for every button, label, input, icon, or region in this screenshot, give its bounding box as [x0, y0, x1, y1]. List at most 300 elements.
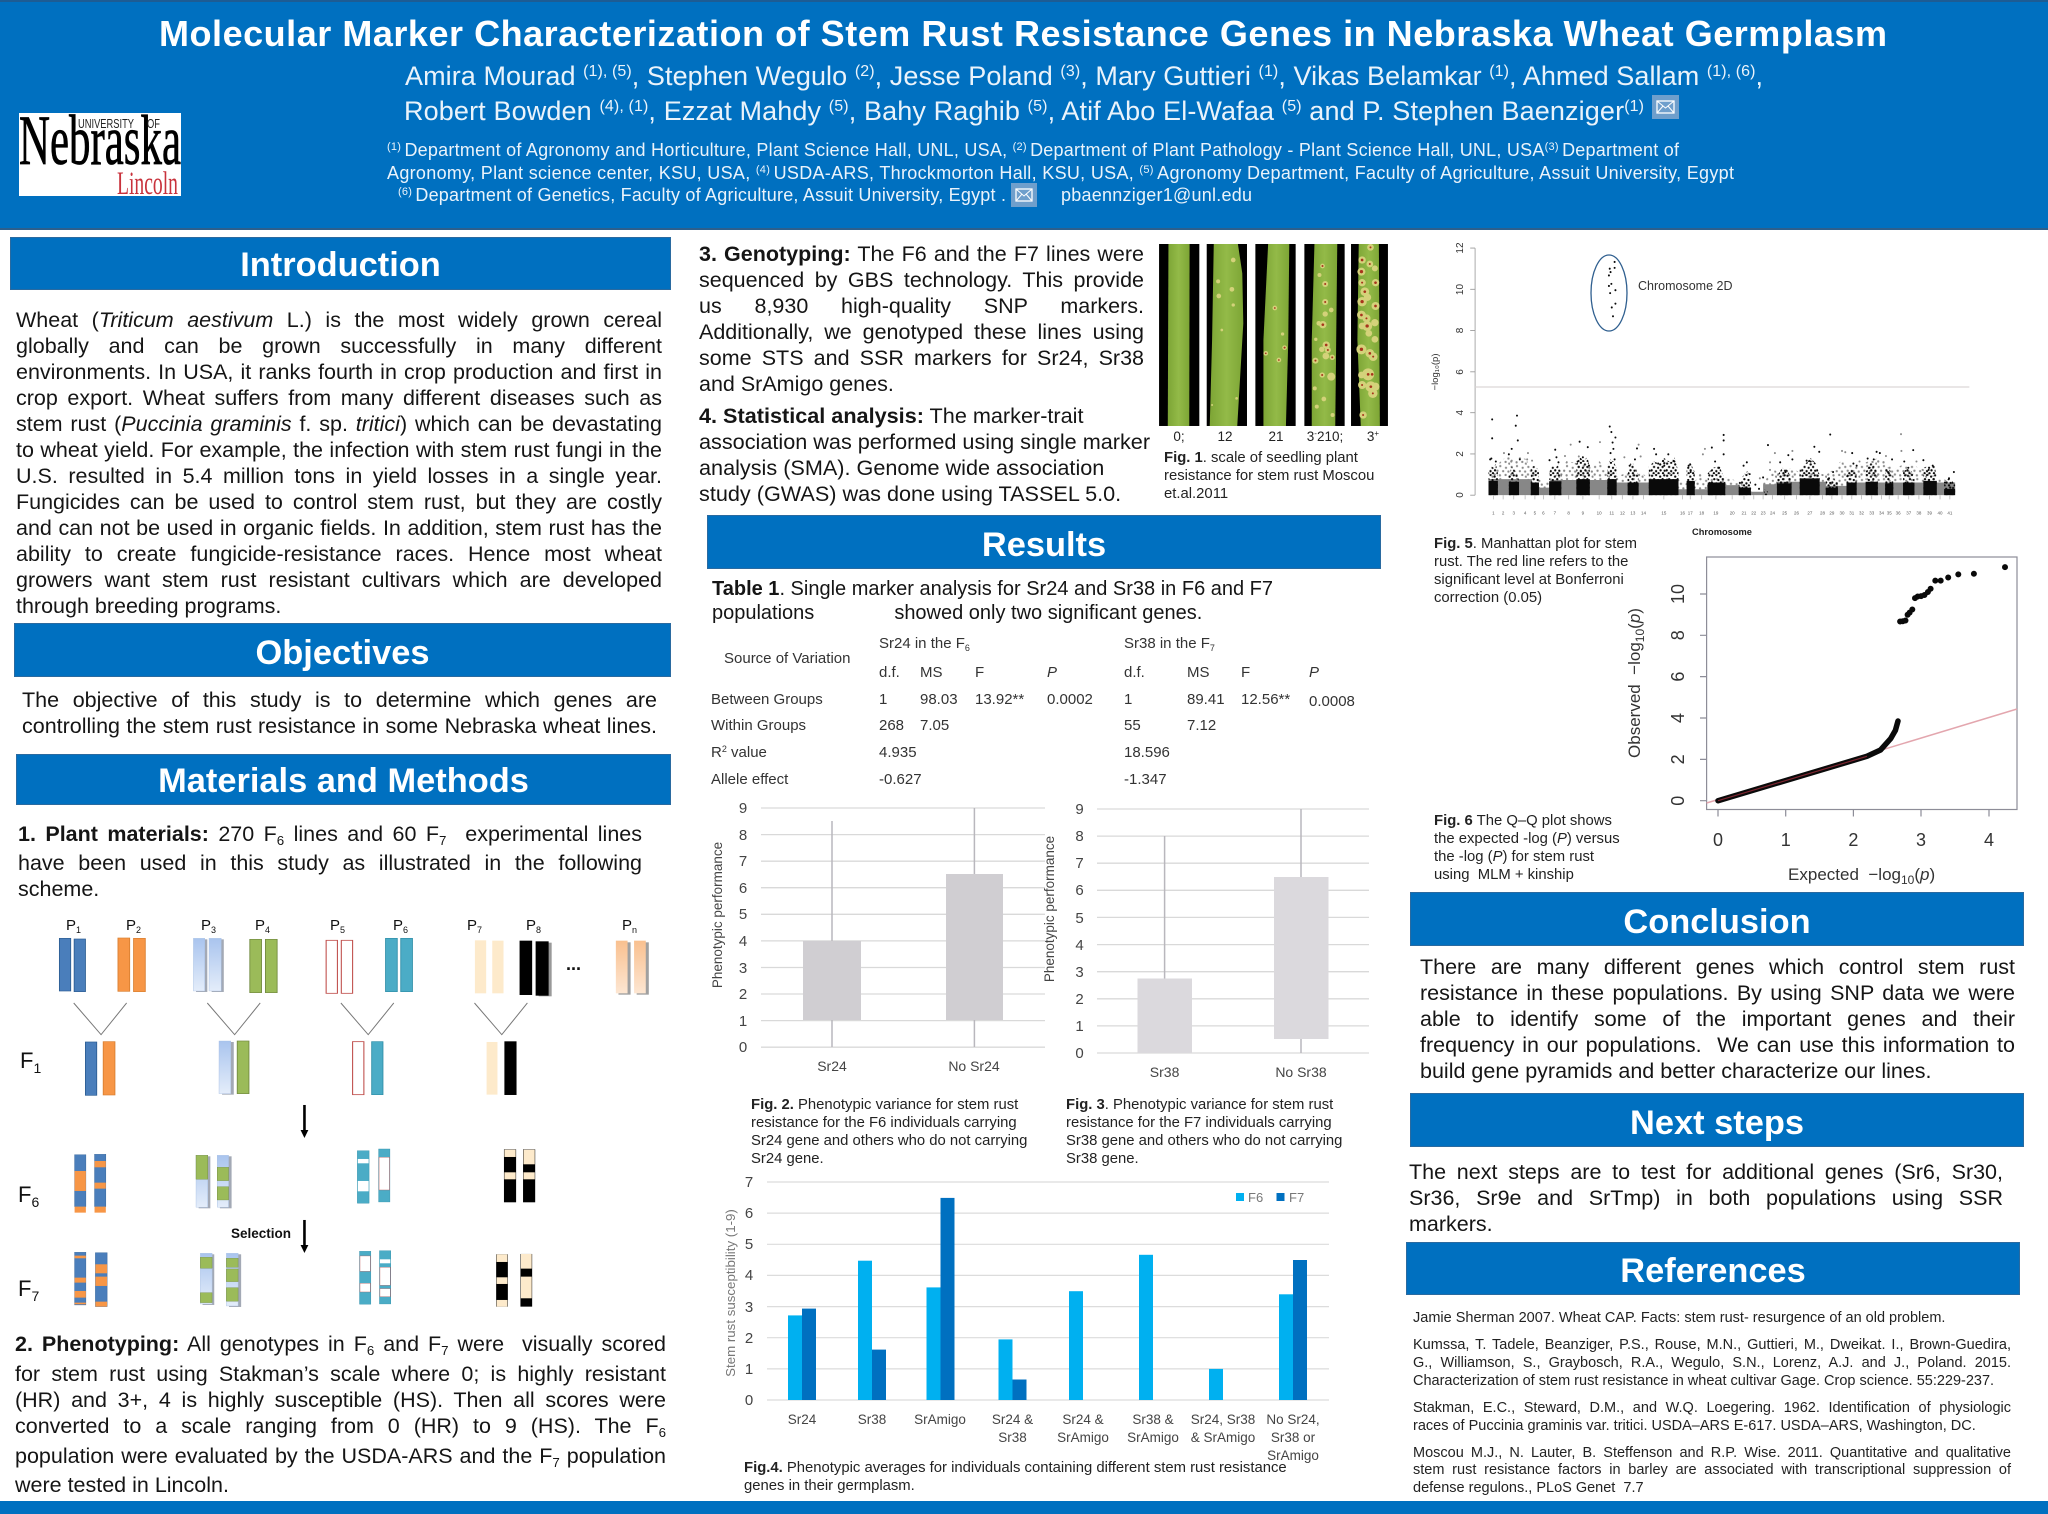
figure 2: box chart Sr24: No Sr24: [948, 1058, 1000, 1074]
affiliations: (4): [756, 164, 773, 176]
figure 4: grouped bar chart: Sr24, Sr38: [1191, 1412, 1255, 1427]
affiliations: (3): [1545, 141, 1562, 153]
text: introduction: and can not be used in organic fields. In addition, stem rust has the: [16, 516, 662, 540]
parent and generation labels: P: [66, 917, 76, 934]
table 1: Allele effect: [711, 771, 789, 788]
table 1: MS: [1187, 664, 1210, 681]
y tick labels: 2: [1455, 451, 1466, 457]
figure 2: box chart Sr24: [710, 800, 1045, 1074]
text: references: defense regulons., PLoS Genet 7.7: [1413, 1480, 1644, 1496]
text: plant materials: have been used in this study as illustrated in the following: [18, 851, 642, 875]
table 1: 2: [722, 744, 727, 754]
text: phenotyping: [15, 1332, 666, 1497]
heading: Materials and Methods: Materials and Methods: [158, 762, 529, 800]
text: table 1 title: [712, 578, 1273, 624]
figure 3: box chart Sr38: Sr38: [1150, 1064, 1180, 1080]
table 1: 7.12: [1187, 717, 1216, 734]
parent and generation labels: 3: [211, 925, 216, 935]
authors: , Jesse Poland: [875, 61, 1060, 91]
figure 6: Q-Q plot: 6: [1668, 672, 1688, 682]
text: references: races of Puccinia graminis var. tritici. USDA–ARS E-617. USDA–ARS, Washington, DC.: [1413, 1418, 1976, 1434]
text: objectives: [22, 688, 657, 738]
table 1: Sr24 in the F: [879, 635, 965, 652]
authors: , Ahmed Sallam: [1509, 61, 1707, 91]
figure 6: Q-Q plot: 0: [1713, 830, 1723, 850]
figure 4: grouped bar chart: Sr24: [788, 1412, 817, 1427]
authors: , Mary Guttieri: [1080, 61, 1258, 91]
table 1: 1: [1124, 691, 1132, 708]
parent and generation labels: 7: [31, 1288, 39, 1304]
figure 4: grouped bar chart: SrAmigo: [1057, 1430, 1109, 1445]
text: references: Moscou M.J., N. Lauter, B. Steffenson and R.P. Wise. 2011. Quantitative and qualitative: [1413, 1445, 2011, 1461]
heading: Conclusion: Conclusion: [1623, 903, 1811, 941]
text: plant materials: 1. Plant materials: 270 F6 lines and 60 F7 experimental lines: [18, 822, 642, 848]
caption: figure 1: [1164, 450, 1374, 502]
authors: (4), (1): [599, 98, 648, 115]
logo: University of Nebraska Lincoln: OF: [147, 116, 160, 131]
caption: figure 4: genes in their germplasm.: [744, 1478, 915, 1494]
figure 4: grouped bar chart: SrAmigo: [1267, 1448, 1319, 1463]
gray solid mass: [1489, 479, 1955, 495]
chromosome numbers: 15: [1661, 510, 1667, 516]
text: introduction: stem rust (Puccinia graminis f. sp. tritici) which can be devastating: [16, 412, 662, 436]
text: next steps: [1409, 1160, 2003, 1236]
figure 6: Q-Q plot: 10: [1668, 584, 1688, 604]
F6 bars: [788, 1255, 1293, 1400]
figure 3: box chart Sr38: 1: [1075, 1018, 1084, 1035]
parent and generation labels: 1: [76, 925, 81, 935]
caption: figure 2: [751, 1097, 1027, 1167]
leaf scale labels: +: [1374, 429, 1379, 438]
figure 6: Q-Q plot: 0: [1668, 796, 1688, 806]
heading: References: [1406, 1242, 2020, 1295]
chromosome numbers: 27: [1807, 510, 1813, 516]
figure 6: Q-Q plot: [1625, 557, 2017, 887]
y tick labels: 12: [1455, 242, 1466, 254]
figure 4: grouped bar chart: & SrAmigo: [1191, 1430, 1255, 1445]
figure 4: grouped bar chart: No Sr24,: [1266, 1412, 1320, 1427]
authors: Amira Mourad: [405, 61, 575, 91]
parent and generation labels: 2: [136, 925, 141, 935]
text: genotyping: 3. Genotyping: The F6 and the F7 lines were: [699, 242, 1144, 266]
figure 2: box chart Sr24: 3: [739, 960, 747, 977]
table 1: 98.03: [920, 691, 958, 708]
parent and generation labels: [18, 917, 637, 1304]
text: introduction: environments. In USA, it ranks fourth in crop production and first in: [16, 360, 662, 384]
chromosome numbers: 8: [1567, 510, 1570, 516]
figure 4: grouped bar chart: [723, 1174, 1329, 1463]
text: genotyping: and SrAmigo genes.: [699, 372, 894, 396]
text: introduction: through breeding programs.: [16, 594, 281, 618]
caption: figure 1: et.al.2011: [1164, 486, 1228, 502]
text: genotyping: [699, 242, 1144, 396]
figure 4: grouped bar chart: 7: [745, 1174, 753, 1191]
table 1: 6: [965, 643, 970, 653]
text: introduction: growers want stem rust resistant cultivars which are developed: [16, 568, 662, 592]
caption: figure 2: Sr24 gene and others who do not carrying: [751, 1133, 1027, 1149]
authors: ,: [1755, 61, 1763, 91]
table 1: 0.0002: [1047, 691, 1093, 708]
parent and generation labels: P: [330, 917, 340, 934]
figure 6: Q-Q plot: 4: [1984, 830, 1994, 850]
leaf scale labels: 12: [1217, 429, 1233, 444]
text: references: G., Williamson, S., Graybosch, R.A., Wegulo, S.N., Lorenz, A.J. and J., Poland. 2015.: [1413, 1355, 2011, 1371]
chromosome numbers: 30: [1840, 510, 1845, 516]
figure 2: box chart Sr24: 8: [739, 827, 747, 844]
affiliations: Agronomy, Plant science center, KSU, USA,: [387, 163, 750, 183]
figure 4: grouped bar chart: Sr24 &: [992, 1412, 1033, 1427]
caption: figure 3: resistance for the F7 individuals carrying: [1066, 1115, 1332, 1131]
text: introduction: U.S. resulted in 5.4 million tons in yield losses in a single year.: [16, 464, 662, 488]
authors: , Vikas Belamkar: [1278, 61, 1489, 91]
text: introduction: [16, 308, 662, 618]
heading: Results: Results: [982, 526, 1106, 564]
F1 row: [85, 1041, 517, 1095]
y tick labels: 8: [1455, 327, 1466, 333]
caption: figure 6: Fig. 6 The Q–Q plot shows: [1434, 813, 1612, 829]
figure 3: box chart Sr38: 9: [1075, 801, 1084, 818]
figure 4: grouped bar chart: 6: [745, 1205, 753, 1222]
text: conclusion: resistance in these populations. By using SNP data we were: [1420, 981, 2015, 1005]
figure 3: box chart Sr38: 3: [1075, 964, 1084, 981]
heading: Objectives: [14, 623, 671, 677]
text: references: [1413, 1310, 2012, 1496]
figure 3: box chart Sr38: 0: [1075, 1045, 1084, 1062]
figure 6: Q-Q plot: 4: [1668, 713, 1688, 723]
affiliations: (2): [1013, 141, 1030, 153]
parent and generation labels: P: [126, 917, 136, 934]
chromosome numbers: 35: [1887, 510, 1892, 516]
chromosome numbers: 32: [1859, 510, 1864, 516]
text: conclusion: build gene pyramids and better characterize our lines.: [1420, 1059, 1932, 1083]
caption: figure 5: correction (0.05): [1434, 590, 1542, 606]
heading: Conclusion: [1410, 892, 2024, 946]
text: plant materials: [18, 822, 642, 901]
affiliations: (6): [398, 186, 415, 198]
figure 6: Q-Q plot: p): [1625, 608, 1644, 623]
authors: (2): [855, 63, 875, 80]
figure 6: Q-Q plot: 1: [1781, 830, 1791, 850]
text: introduction: to wheat yield. For example, the infection with stem rust fungi in the: [16, 438, 662, 462]
affiliations: Department of: [1562, 140, 1680, 160]
header banner: [0, 0, 2048, 230]
text: statistical analysis: study (GWAS) was done using TASSEL 5.0.: [699, 481, 1121, 506]
text: conclusion: frequency in our populations. We can use this information to: [1420, 1033, 2015, 1057]
parent and generation labels: P: [255, 917, 265, 934]
table 1: [711, 635, 1355, 788]
y tick labels: 0: [1455, 492, 1466, 498]
chromosome numbers: 39: [1927, 510, 1932, 516]
text: statistical analysis: association was performed using single marker: [699, 429, 1150, 454]
parent and generation labels: 8: [536, 925, 541, 935]
table 1: F: [975, 664, 984, 681]
figure 5: Manhattan plot: −log₁₀(p): [1430, 354, 1441, 390]
figure 3: box chart Sr38: [1042, 801, 1369, 1080]
caption: figure 3: Sr38 gene.: [1066, 1151, 1139, 1167]
text: statistical analysis: analysis (SMA). Genome wide association: [699, 455, 1104, 480]
heading: Materials and Methods: [16, 754, 671, 805]
table 1: -1.347: [1124, 771, 1167, 788]
text: phenotyping: for stem rust using Stakman’s scale where 0; is highly resistant: [15, 1362, 666, 1386]
text: introduction: ability to create fungicide-resistance races. Hence most wheat: [16, 542, 662, 566]
heading: References: References: [1620, 1252, 1806, 1290]
caption: figure 5: Fig. 5. Manhattan plot for stem: [1434, 536, 1637, 552]
figure 6: Q-Q plot: 3: [1916, 830, 1926, 850]
authors: (5): [1028, 98, 1047, 115]
authors: (1): [1489, 63, 1509, 80]
figure 3: box chart Sr38: 2: [1075, 991, 1084, 1008]
arrows: [301, 1105, 308, 1253]
figure 4: grouped bar chart: Sr38: [998, 1430, 1027, 1445]
chromosome numbers: 28: [1820, 510, 1825, 516]
text: genotyping: sequenced by GBS technology. This provide: [699, 268, 1144, 292]
chromosome numbers: 4: [1524, 510, 1527, 516]
parents row: [59, 938, 649, 996]
chromosome numbers: 11: [1609, 510, 1615, 516]
affiliations: pbaennziger1@unl.edu: [1061, 185, 1252, 205]
affiliations: Department of Agronomy and Horticulture, Plant Science Hall, UNL, USA,: [404, 140, 1012, 160]
caption: figure 5: significant level at Bonferroni: [1434, 572, 1624, 588]
axes and threshold line: [1470, 248, 1475, 495]
text: table 1 title: populations showed only two significant genes.: [712, 602, 1202, 624]
icon: envelope authors: [1652, 95, 1679, 119]
authors: (1): [1624, 98, 1644, 115]
figure 4: grouped bar chart: Sr38: [858, 1412, 886, 1427]
figure 3: box chart Sr38: 7: [1075, 855, 1084, 872]
affiliations: Department of Plant Pathology - Plant Science Hall, UNL, USA: [1030, 140, 1544, 160]
text: introduction: Wheat (Triticum aestivum L.) is the most widely grown cereal: [16, 308, 662, 332]
heading: Next steps: Next steps: [1630, 1104, 1804, 1142]
heading: Objectives: Objectives: [256, 634, 429, 672]
legend: F7: [1289, 1190, 1304, 1205]
text: next steps: Sr36, Sr9e and SrTmp) in both populations using SSR: [1409, 1186, 2003, 1210]
chromosome numbers: 29: [1829, 510, 1835, 516]
text: introduction: globally and can be grown successfully in many different: [16, 334, 662, 358]
parent and generation labels: 1: [33, 1060, 41, 1076]
figure 2: box chart Sr24: 4: [739, 933, 747, 950]
table 1: -0.627: [879, 771, 922, 788]
figure 4: grouped bar chart: Sr24 &: [1062, 1412, 1104, 1427]
text: phenotyping: converted to a scale ranging from 0 (HR) to 9 (HS). The F6: [15, 1414, 666, 1440]
affiliations: (1): [387, 141, 404, 153]
figure 4: grouped bar chart: 2: [745, 1330, 753, 1347]
chromosome numbers: 26: [1794, 510, 1799, 516]
legend: [1236, 1190, 1304, 1205]
scatter points: [1490, 262, 1954, 489]
leaf scale labels: [1173, 429, 1379, 444]
figure 4: grouped bar chart: 4: [745, 1267, 753, 1284]
F7 row: [75, 1251, 532, 1307]
table 1: 1: [879, 691, 887, 708]
authors: , Bahy Raghib: [849, 96, 1028, 126]
figure 4: grouped bar chart: 3: [745, 1299, 753, 1316]
leaf scale labels: 21: [1268, 429, 1284, 444]
chromosome numbers: 13: [1630, 510, 1636, 516]
figure 6: Q-Q plot: 10: [1901, 873, 1915, 887]
text: phenotyping: (HR) and 3+, 4 is highly susceptible (HS). Then all scores were: [15, 1388, 666, 1412]
text: objectives: The objective of this study is to determine which genes are: [22, 688, 657, 712]
chromosome numbers: 10: [1597, 510, 1602, 516]
text: statistical analysis: [699, 403, 1150, 506]
logo: University of Nebraska Lincoln: UNIVERSITY: [78, 116, 134, 131]
caption: figure 2: resistance for the F6 individuals carrying: [751, 1115, 1017, 1131]
leaf scale labels: 3: [1367, 429, 1374, 444]
chromosome numbers: 20: [1730, 510, 1735, 516]
y tick labels: 6: [1455, 369, 1466, 375]
table 1: P: [1047, 664, 1057, 681]
table 1: d.f.: [879, 664, 900, 681]
chromosome numbers: 17: [1688, 510, 1693, 516]
figure 6: Q-Q plot: 2: [1668, 754, 1688, 764]
figure 3: box chart Sr38: 5: [1075, 910, 1084, 927]
table 1: P: [1309, 664, 1319, 681]
table 1: 13.92**: [975, 691, 1024, 708]
parent and generation labels: P: [393, 917, 403, 934]
chromosome numbers: 23: [1761, 510, 1766, 516]
chromosome numbers: 9: [1582, 510, 1585, 516]
text: next steps: The next steps are to test for additional genes (Sr6, Sr30,: [1409, 1160, 2003, 1184]
text: genotyping: some STS and SSR markers for Sr24, Sr38: [699, 346, 1144, 370]
authors: (1), (5): [583, 63, 632, 80]
figure 2: box chart Sr24: 6: [739, 880, 747, 897]
figure 4: grouped bar chart: Sr38 &: [1132, 1412, 1174, 1427]
caption: figure 6: the expected -log (P) versus: [1434, 831, 1620, 847]
figure 3: box chart Sr38: 6: [1075, 882, 1084, 899]
leaf scale labels: 3: [1307, 429, 1314, 444]
figure 2: box chart Sr24: 1: [739, 1013, 747, 1030]
y tick labels: 4: [1455, 409, 1466, 415]
table 1: 12.56**: [1241, 691, 1290, 708]
authors: (1): [1259, 63, 1278, 80]
title: Molecular Marker Characterization of Stem Rust Resistance Genes in Nebraska Wheat Germplasm: [159, 13, 1887, 54]
legend: F6: [1248, 1190, 1263, 1205]
text: table 1 title: Table 1. Single marker analysis for Sr24 and Sr38 in F6 and F7: [712, 578, 1273, 600]
authors: (5): [829, 98, 849, 115]
text: references: Stakman, E.C., Steward, D.M., and W.Q. Loegering. 1962. Identification of physiologic: [1413, 1400, 2011, 1416]
text: phenotyping: population were evaluated by the USDA-ARS and the F7 population: [15, 1444, 666, 1470]
figure 2: box chart Sr24: Phenotypic performance: [710, 842, 725, 988]
figure 4: grouped bar chart: SrAmigo: [914, 1412, 966, 1427]
caption: figure 2: Sr24 gene.: [751, 1151, 824, 1167]
chromosome numbers: 2: [1502, 510, 1505, 516]
authors: (5): [1282, 98, 1302, 115]
figure 6: Q-Q plot: (: [1914, 865, 1920, 884]
logo: University of Nebraska Lincoln: Nebraska: [19, 102, 181, 180]
chromosome numbers: 22: [1751, 510, 1757, 516]
table 1: value: [727, 744, 767, 761]
table 1: d.f.: [1124, 664, 1145, 681]
authors: (1), (6): [1707, 63, 1755, 80]
heading: Introduction: [10, 237, 671, 290]
figure 5: Manhattan plot: [1430, 242, 1969, 537]
caption: figure 3: [1066, 1097, 1342, 1167]
text: next steps: markers.: [1409, 1212, 1493, 1236]
black solid mass: [1489, 478, 1955, 495]
chromosome numbers: 19: [1713, 510, 1719, 516]
text: conclusion: [1420, 955, 2015, 1083]
chromosome numbers: 40: [1938, 510, 1943, 516]
table 1: F: [1241, 664, 1250, 681]
parent and generation labels: F: [18, 1276, 31, 1301]
figure 6: Q-Q plot: 8: [1668, 630, 1688, 640]
table 1: MS: [920, 664, 942, 681]
table 1: 7.05: [920, 717, 949, 734]
chromosome numbers: 37: [1906, 510, 1912, 516]
parent and generation labels: P: [622, 917, 632, 934]
figure 3: box chart Sr38: No Sr38: [1275, 1064, 1327, 1080]
logo: University of Nebraska Lincoln: [19, 102, 181, 202]
table 1: Sr38 in the F: [1124, 635, 1210, 652]
authors: , Ezzat Mahdy: [648, 96, 829, 126]
chromosome numbers: 25: [1782, 510, 1788, 516]
authors: Robert Bowden: [404, 96, 592, 126]
affiliations: Department of Genetics, Faculty of Agriculture, Assuit University, Egypt .: [415, 185, 1006, 205]
authors: , Atif Abo El-Wafaa: [1048, 96, 1282, 126]
y tick labels: [1455, 242, 1466, 498]
icon: envelope affiliations: [1011, 183, 1037, 207]
figure 2: box chart Sr24: 2: [739, 986, 747, 1003]
parent and generation labels: 6: [403, 925, 408, 935]
caption: figure 2: Fig. 2. Phenotypic variance for stem rust: [751, 1097, 1018, 1113]
table 1: Between Groups: [711, 691, 823, 708]
figure 4: grouped bar chart: 1: [745, 1361, 753, 1378]
figure 2: box chart Sr24: 7: [739, 853, 747, 870]
figure 6: Q-Q plot: Expected −log: [1788, 865, 1901, 884]
text: introduction: Fungicides can be used to control stem rust, but they are costly: [16, 490, 662, 514]
table 1: 268: [879, 717, 904, 734]
caption: figure 6: the -log (P) for stem rust: [1434, 849, 1594, 865]
heading: Results: [707, 515, 1381, 569]
leaf scale labels: 0;: [1173, 429, 1185, 444]
text: references: Kumssa, T. Tadele, Beanziger, P.S., Rouse, M.N., Guttieri, M., Dweikat. I., Brown-Guedira,: [1413, 1337, 2011, 1353]
parent and generation labels: P: [467, 917, 477, 934]
caption: figure 5: [1434, 536, 1637, 606]
chromosome numbers: 21: [1741, 510, 1747, 516]
figure 4: grouped bar chart: Stem rust susceptibility (1-9): [723, 1209, 738, 1377]
parent and generation labels: P: [201, 917, 211, 934]
table 1: 18.596: [1124, 744, 1170, 761]
table 1: Within Groups: [711, 717, 806, 734]
text: references: Characterization of stem rust resistance in wheat cultivar Gage. Crop science. 55:229-237.: [1413, 1373, 1994, 1389]
caption: figure 3: Fig. 3. Phenotypic variance for stem rust: [1066, 1097, 1333, 1113]
affiliations: (5): [1139, 164, 1157, 176]
leaf scale labels: -: [1314, 429, 1317, 438]
figure 4: grouped bar chart: SrAmigo: [1127, 1430, 1179, 1445]
figure: breeding scheme: [18, 917, 649, 1307]
chromosome numbers: 5: [1534, 510, 1537, 516]
parent and generation labels: n: [632, 925, 637, 935]
text: plant materials: scheme.: [18, 877, 99, 901]
figure 3: box chart Sr38: 4: [1075, 937, 1084, 954]
caption: figure 3: Sr38 gene and others who do not carrying: [1066, 1133, 1342, 1149]
y tick labels: 10: [1455, 284, 1466, 295]
text: objectives: controlling the stem rust resistance in some Nebraska wheat lines.: [22, 714, 657, 738]
chromosome numbers: 7: [1554, 510, 1557, 516]
text: references: stem rust resistance factors in barley are associated with transcriptional suppression of: [1413, 1462, 2011, 1478]
parent and generation labels: P: [526, 917, 536, 934]
text: conclusion: able to identify some of the important genes and their: [1420, 1007, 2015, 1031]
parent and generation labels: 4: [265, 925, 270, 935]
figure 4: grouped bar chart: 5: [745, 1236, 753, 1253]
affiliations: [387, 140, 1734, 205]
heading: Introduction: Introduction: [240, 246, 441, 284]
chromosome numbers: 41: [1947, 510, 1953, 516]
chromosome numbers: 18: [1699, 510, 1705, 516]
figure 5: Manhattan plot: Chromosome: [1692, 527, 1752, 537]
figure 3: box chart Sr38: Phenotypic performance: [1042, 836, 1057, 982]
parent and generation labels: Selection: [231, 1226, 291, 1241]
gray speckled points: [1489, 456, 1955, 495]
